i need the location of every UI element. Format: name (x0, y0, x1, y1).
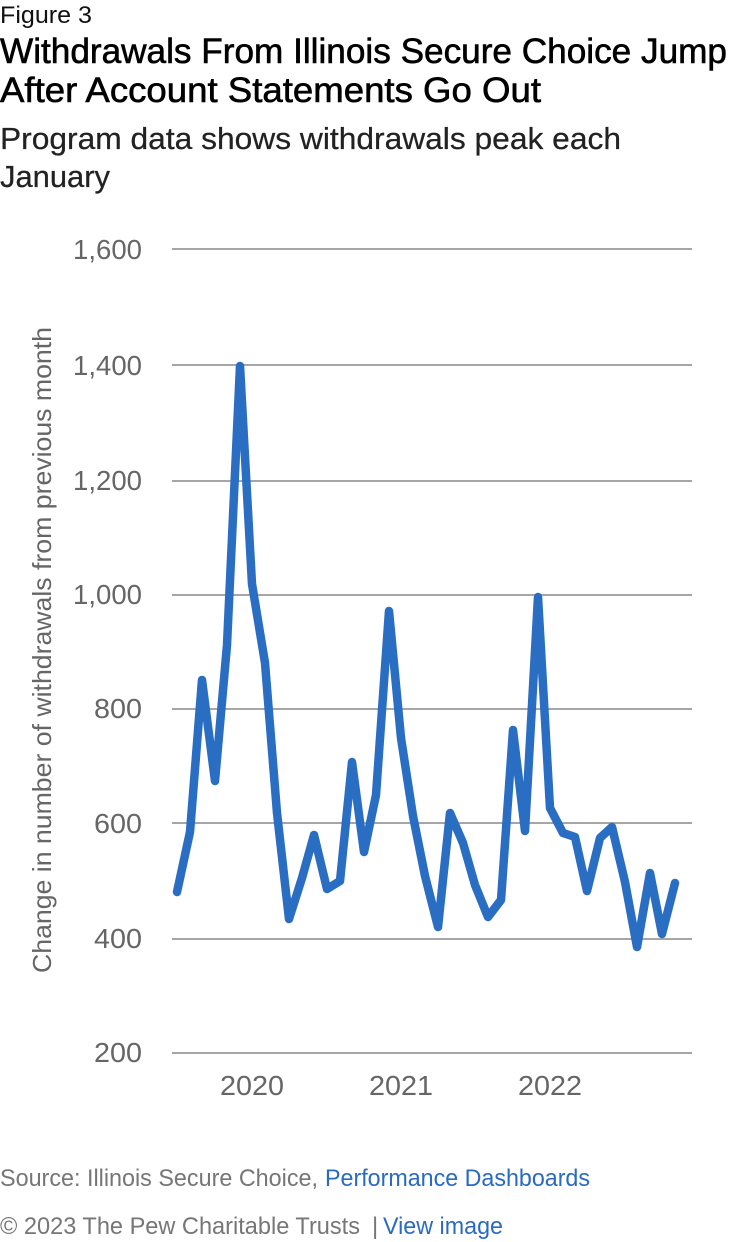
source line (0, 1165, 590, 1192)
y axis labels: 400 (94, 923, 142, 954)
y axis labels: 1,000 (73, 579, 142, 610)
y axis labels: 1,600 (73, 234, 142, 265)
copyright line: © 2023 The Pew Charitable Trusts (0, 1213, 360, 1240)
title: Withdrawals From Illinois Secure Choice Jump (0, 32, 727, 71)
data line (177, 366, 675, 947)
figure label: Figure 3 (0, 2, 92, 29)
x axis labels: 2021 (369, 1070, 433, 1101)
y axis labels: 600 (94, 808, 142, 839)
source line: Source: Illinois Secure Choice, (0, 1165, 318, 1192)
line chart (27, 234, 692, 1101)
x axis labels: 2020 (220, 1070, 284, 1101)
y axis labels: 800 (94, 693, 142, 724)
y axis labels: 1,200 (73, 465, 142, 496)
x axis labels (220, 1070, 582, 1101)
y axis labels: 1,400 (73, 350, 142, 381)
x axis labels: 2022 (518, 1070, 582, 1101)
title: After Account Statements Go Out (0, 71, 541, 110)
title (0, 32, 727, 110)
subtitle: January (0, 159, 110, 194)
copyright line: View image (383, 1213, 503, 1240)
y axis title: Change in number of withdrawals from previous month (27, 327, 57, 973)
subtitle (0, 121, 621, 194)
y axis labels: 200 (94, 1037, 142, 1068)
y axis labels (73, 234, 142, 1068)
source line: Performance Dashboards (325, 1165, 590, 1192)
subtitle: Program data shows withdrawals peak each (0, 121, 621, 156)
copyright line: | (372, 1213, 378, 1240)
